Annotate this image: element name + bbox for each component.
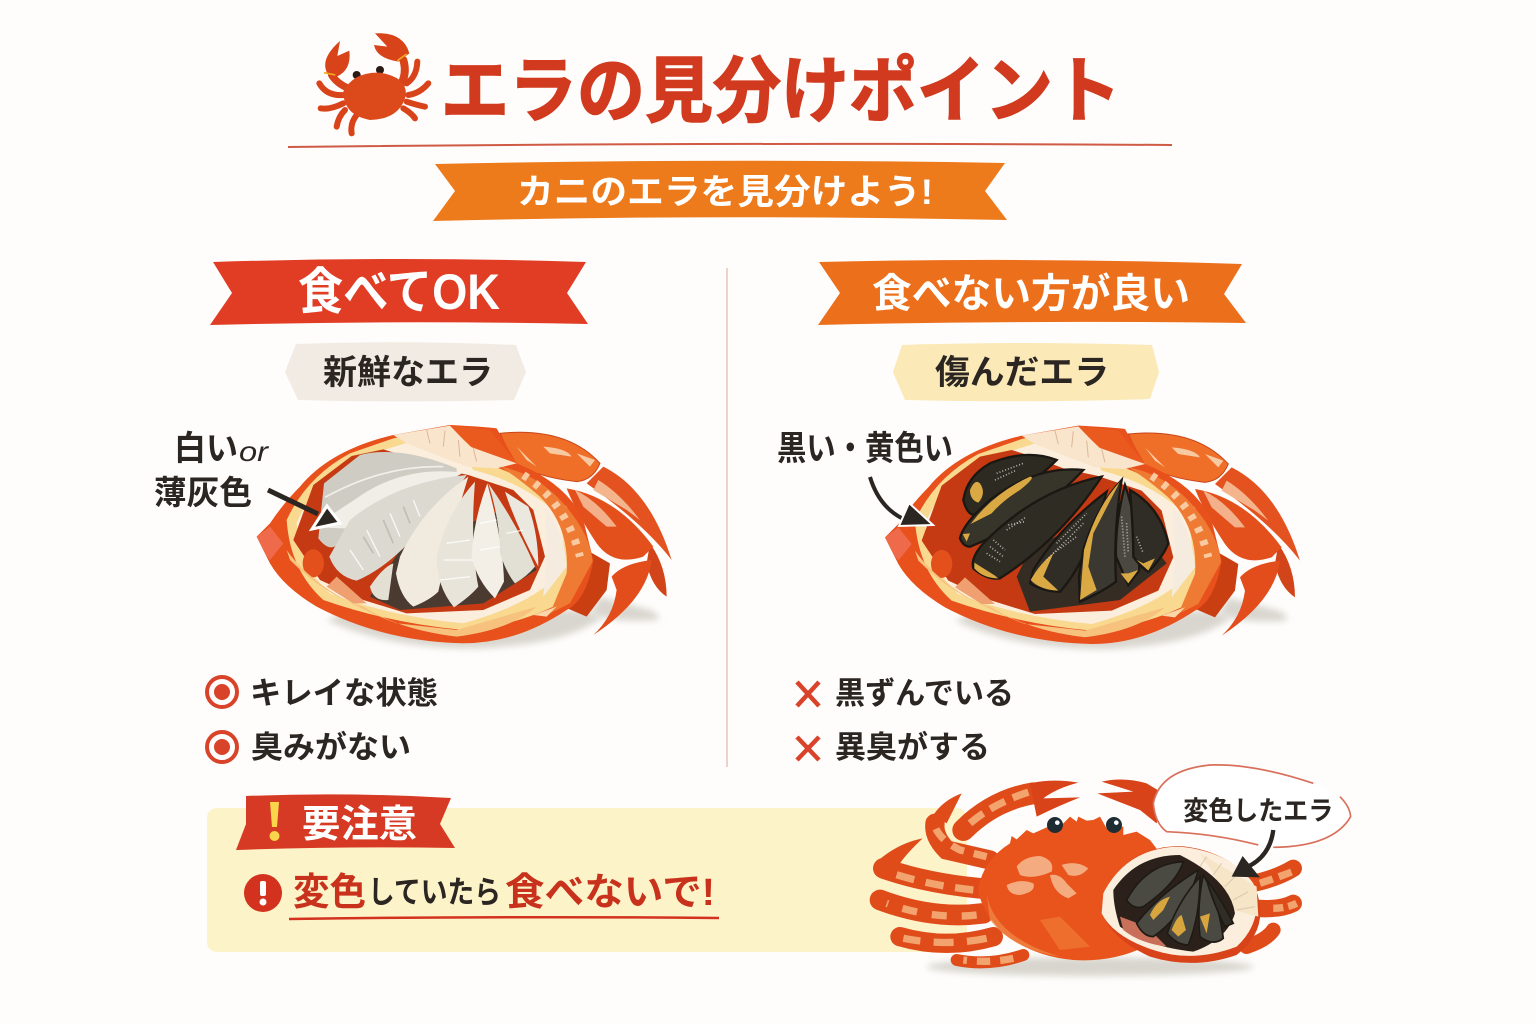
- pale patches on legs: [887, 792, 1297, 961]
- banner background: [207, 808, 967, 952]
- arrow: to white gills: [268, 490, 340, 529]
- crab body: [978, 817, 1177, 960]
- divider: [726, 268, 728, 767]
- icon: title crab: [319, 33, 428, 133]
- heading ribbon: OK: 食べてOK: [298, 264, 500, 320]
- heading ribbon: NG: [818, 260, 1246, 325]
- label: white or light gray: 白い: [174, 430, 238, 468]
- checklist: good signs: キレイな状態: [250, 676, 438, 711]
- label: white or light gray: or: [239, 436, 270, 467]
- checklist: bad signs: [797, 676, 1014, 765]
- panel: caution banner: [207, 794, 967, 952]
- label: white or light gray: 薄灰色: [154, 474, 252, 511]
- subheading: damaged gills: 傷んだエラ: [935, 354, 1109, 392]
- speech bubble: [1153, 765, 1351, 847]
- label: black or yellow: 黒い・黄色い: [777, 430, 953, 468]
- illustration: crab with black gills: [885, 426, 1300, 649]
- icon: exclamation circle: [244, 874, 282, 912]
- icon: double circle: [207, 732, 237, 762]
- subtitle ribbon: [433, 161, 1007, 221]
- checklist: bad signs: 黒ずんでいる: [835, 676, 1014, 711]
- warning text: していたら: [368, 875, 501, 910]
- label: white or light gray: [154, 430, 270, 511]
- title underline: [288, 144, 1172, 147]
- caution flag: 要注意: [302, 804, 417, 846]
- panel: not recommended gills: [777, 260, 1300, 765]
- heading ribbon: NG: 食べない方が良い: [872, 272, 1190, 316]
- arrow: to discolored gills: [1232, 830, 1273, 877]
- icon: double circle: [207, 677, 237, 707]
- panel: OK gills: [154, 259, 672, 765]
- checklist: bad signs: 異臭がする: [835, 730, 990, 765]
- subheading: fresh gills: 新鮮なエラ: [323, 354, 493, 392]
- checklist: good signs: [207, 676, 438, 765]
- subheading: damaged gills: [893, 343, 1159, 401]
- subtitle ribbon: カニのエラを見分けよう!: [517, 173, 933, 212]
- arrow: to black gills: [870, 477, 933, 526]
- warning text: 食べないで!: [505, 872, 715, 914]
- checklist: good signs: 臭みがない: [251, 730, 411, 765]
- title: エラの見分けポイント: [441, 52, 1121, 132]
- illustration: whole crab with discolored gills: [875, 765, 1351, 976]
- heading ribbon: OK: [210, 259, 588, 325]
- crab eyes: [1047, 817, 1122, 833]
- illustration: crab with white gills: [257, 425, 672, 648]
- warning underline: [289, 917, 719, 919]
- icon: cross: [797, 682, 819, 760]
- warning text: 変色: [293, 872, 366, 914]
- warning text: [293, 872, 715, 914]
- caution flag: [236, 794, 455, 850]
- crab legs and claws: [880, 793, 1293, 962]
- open shell with dark gills: [1102, 846, 1260, 963]
- speech bubble: 変色したエラ: [1183, 796, 1333, 826]
- subheading: fresh gills: [285, 342, 526, 402]
